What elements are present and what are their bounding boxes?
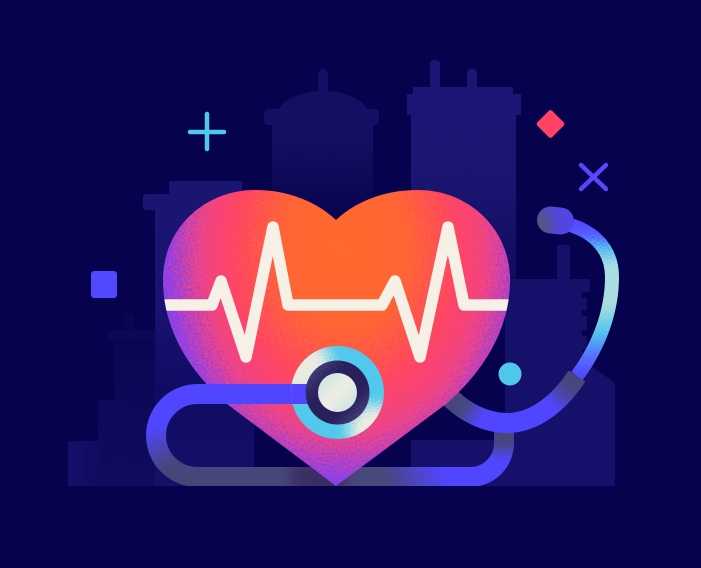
dot — [498, 362, 522, 386]
stethoscope: tube top segment over heart — [206, 384, 292, 404]
building: small left tower — [68, 330, 155, 486]
stethoscope: ear piece — [537, 206, 574, 234]
building: domed tower — [264, 69, 379, 199]
chest piece core — [318, 373, 357, 412]
icon: square — [91, 271, 117, 298]
stethoscope: tube loop behind heart — [146, 384, 514, 486]
stethoscope: y-branch tube — [444, 370, 586, 433]
building: lower right block — [411, 245, 615, 486]
icon: diamond — [536, 109, 565, 139]
icon: plus — [190, 114, 224, 149]
building: right tower — [407, 60, 521, 279]
ecg pulse line — [155, 227, 520, 357]
heart — [163, 190, 510, 486]
illustration: heart with stethoscope — [68, 60, 619, 486]
chest piece dark ring — [306, 360, 370, 424]
icon: cross — [581, 165, 606, 189]
heart gradient fill — [163, 190, 510, 486]
stethoscope: ear tube — [568, 218, 619, 380]
buildings skyline — [60, 60, 615, 520]
chest piece outer ring — [291, 346, 384, 439]
building: tall left tower — [143, 181, 254, 486]
stethoscope: chest piece — [291, 346, 384, 439]
